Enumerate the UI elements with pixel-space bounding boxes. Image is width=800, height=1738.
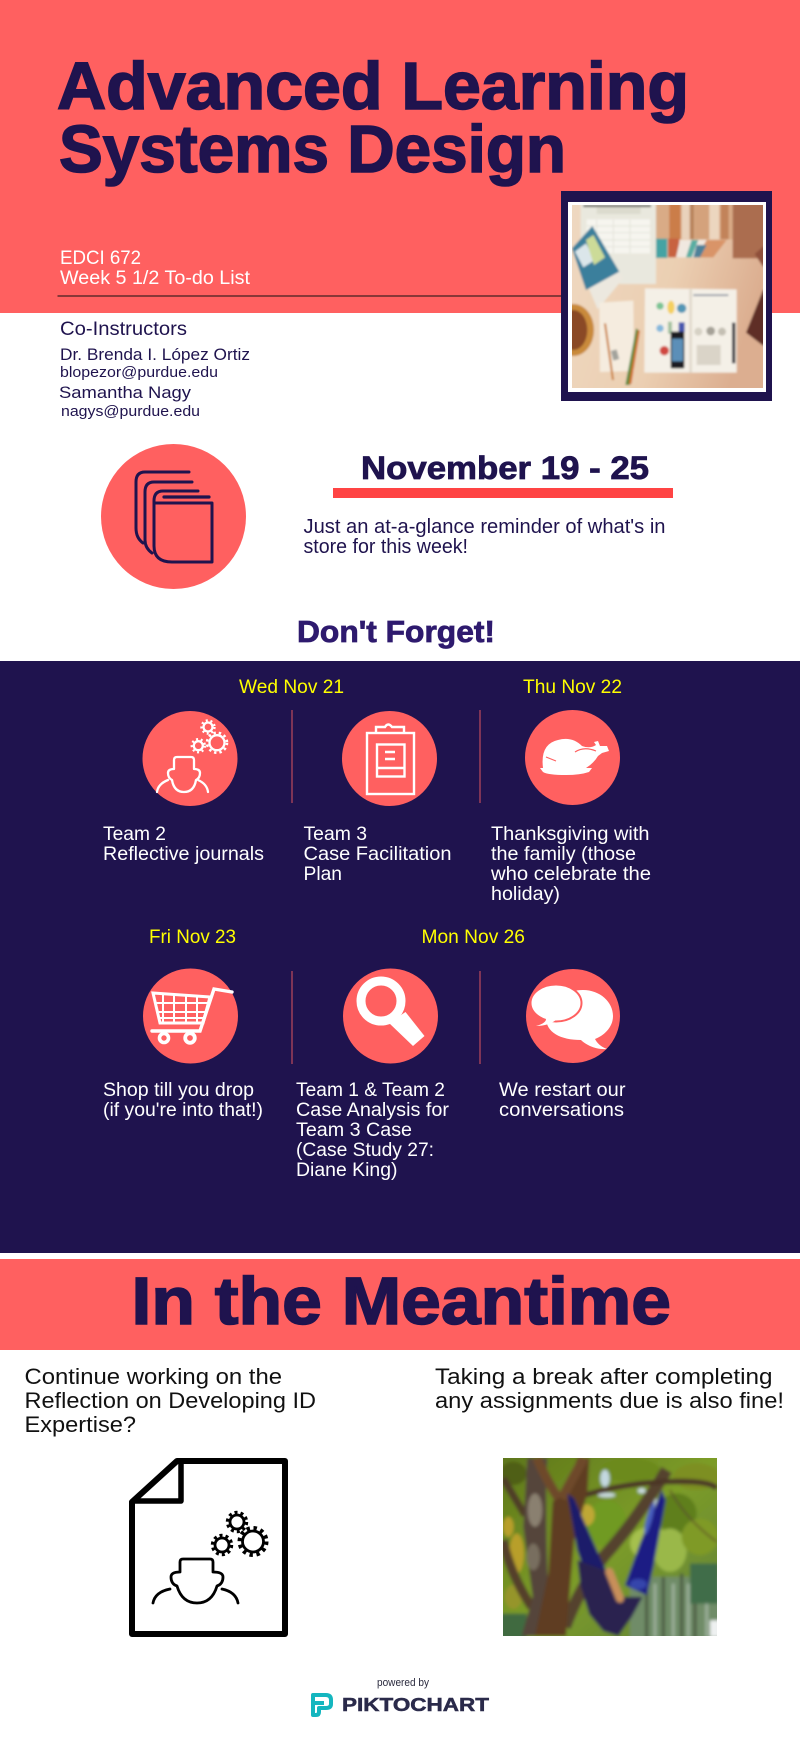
date label: Wed Nov 21: Wed Nov 21 [239,677,344,698]
icon: books circle [101,444,246,589]
piktochart footer [313,1677,489,1715]
date label: Mon Nov 26: Mon Nov 26 [422,927,525,948]
icon: roast turkey [525,710,620,805]
co-instructors text block [59,319,250,420]
panel: don't forget schedule [0,661,800,1253]
text: Shop till you drop: (if you're into that!) [103,1100,263,1121]
text: taking a break: Taking a break after completing [435,1364,772,1389]
text: continue working: Expertise? [24,1412,136,1437]
co-instructors text block: blopezor@purdue.edu [60,364,218,381]
text: taking a break: any assignments due is also fine! [435,1388,784,1413]
text: Team 1 and Team 2: Team 3 Case [296,1120,412,1141]
intro text [304,516,666,558]
text: Team 2 [103,824,264,865]
banner: In the Meantime [0,1259,800,1350]
text: Shop till you drop [103,1080,263,1121]
text: Team 3 [304,824,452,885]
text: Team 3: Case Facilitation [304,844,452,865]
text: piktochart wordmark: PIKTOCHART [342,1695,489,1715]
text: Thanksgiving: the family (those [491,844,636,865]
icon: clipboard [342,711,437,806]
text: Team 1 and Team 2: (Case Study 27: [296,1140,434,1161]
hammock photo [503,1458,717,1636]
intro text: store for this week! [304,536,468,558]
date label: Fri Nov 23: Fri Nov 23 [149,927,236,948]
text: We restart: We restart our [499,1080,626,1101]
text: Team 3: Plan [304,864,342,885]
icon: speech bubbles [526,969,620,1063]
co-instructors text block: nagys@purdue.edu [61,403,200,420]
course label: EDCI 672 [60,248,141,269]
text: We restart: conversations [499,1100,624,1121]
text: Thanksgiving: holiday) [491,884,560,905]
text: Team 3: Team 3 [304,824,367,845]
date label: Thu Nov 22: Thu Nov 22 [523,677,622,698]
co-instructors text block: Dr. Brenda I. López Ortiz [60,345,250,364]
text: Thanksgiving: who celebrate the [490,864,651,885]
date range heading: November 19 - 25 [361,450,649,486]
co-instructors text block: Co-Instructors [60,319,187,340]
intro text: Just an at-a-glance reminder of what's in [304,516,666,538]
date range heading [333,450,673,498]
icon: shopping cart [143,968,238,1064]
text: powered by: powered by [377,1677,429,1689]
text: Team 1 and Team 2: Team 1 & Team 2 [296,1080,445,1101]
course label: Week 5 1/2 To-do List [60,268,251,289]
header band [0,0,800,313]
text: Team 2: Reflective journals [103,844,264,865]
course label [60,248,251,289]
icon: magnifying glass [343,968,438,1064]
text: Shop till you drop: Shop till you drop [103,1080,254,1101]
text: Thanksgiving: Thanksgiving with [491,824,650,845]
heading: Don't Forget: Don't Forget! [297,614,495,649]
banner: In the Meantime: In the Meantime [132,1264,671,1339]
text: We restart [499,1080,626,1121]
title: Systems Design [59,112,566,187]
text: continue working: Continue working on the [24,1364,282,1389]
title [57,49,689,187]
icon: head with gears [142,711,238,806]
text: Thanksgiving [490,824,651,905]
text: continue working: Reflection on Developing ID [24,1388,316,1413]
co-instructors text block: Samantha Nagy [59,383,192,402]
framed desk photo [553,191,772,401]
icon: document with head and gears [132,1461,285,1634]
text: Team 1 and Team 2: Diane King) [296,1160,398,1181]
text: Team 1 and Team 2: Case Analysis for [296,1100,450,1121]
text: Team 2: Team 2 [103,824,166,845]
text: taking a break [435,1364,784,1413]
text: Team 1 and Team 2 [296,1080,450,1181]
text: continue working [24,1364,316,1437]
title: Advanced Learning [57,49,689,124]
icon: piktochart logo [313,1695,331,1715]
